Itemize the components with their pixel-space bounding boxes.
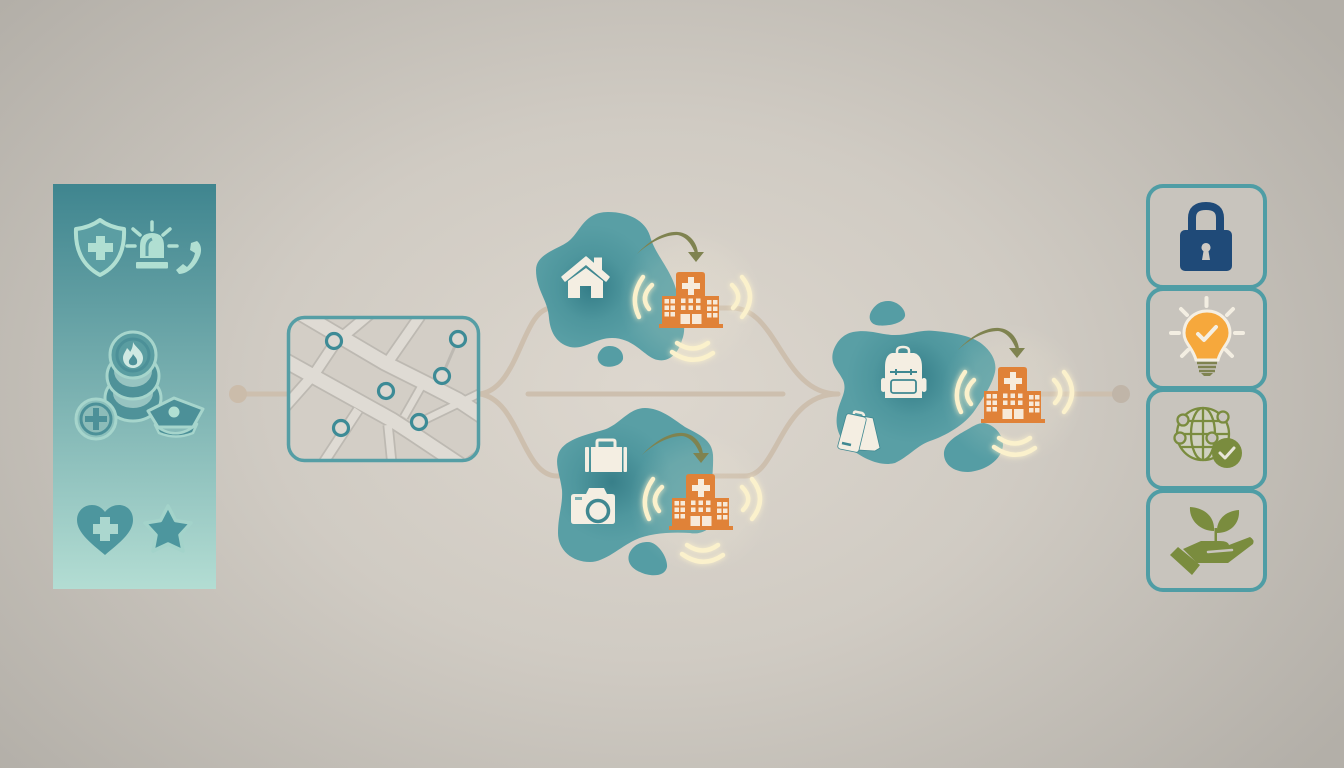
outcome card: sustainability [1148, 491, 1265, 590]
hospital halo [941, 323, 1085, 467]
connector lines [238, 308, 1121, 476]
outcome card: global network [1148, 390, 1265, 488]
icon: backpack [881, 347, 926, 398]
icon: medical shield [76, 220, 124, 275]
icon: hospital [659, 272, 723, 328]
arrow [958, 328, 1025, 358]
icon: telephone [176, 241, 201, 274]
map markers [326, 332, 466, 436]
signal waves [645, 479, 760, 562]
icon: travel bags [838, 412, 880, 452]
icon: heart with cross [77, 505, 133, 555]
icon: globe [1174, 408, 1229, 460]
icon: hospital [981, 367, 1045, 423]
end node [1112, 385, 1130, 403]
blob cluster: luggage and camera [557, 408, 773, 575]
icon: star [145, 506, 191, 551]
hospital halo [629, 430, 773, 574]
icon: light bulb [1171, 298, 1243, 376]
icon: briefcase [585, 440, 627, 472]
icon: check badge [1212, 438, 1242, 468]
blob cluster: home [536, 212, 763, 372]
panel: outcomes [1148, 186, 1265, 590]
icon: hospital [669, 474, 733, 530]
panel: emergency services [53, 184, 216, 589]
blob cluster: backpack and bags [832, 301, 1085, 472]
map panel [286, 316, 480, 462]
icon: camera [571, 488, 615, 524]
outcome card: insight [1148, 289, 1265, 388]
signal waves [957, 372, 1072, 455]
icon: police cap [148, 398, 203, 436]
start node [229, 385, 247, 403]
icon: house [562, 257, 609, 298]
road network [290, 319, 477, 459]
arrow [642, 433, 709, 463]
icon: stacked responder badges [105, 332, 161, 421]
outcome card: security [1148, 186, 1265, 287]
arrow [637, 232, 704, 262]
hospital halo [619, 228, 763, 372]
icon: siren [127, 222, 177, 268]
signal waves [635, 277, 750, 360]
icon: padlock [1180, 206, 1232, 271]
icon: hand holding sprout [1170, 507, 1254, 575]
icon: medical badge [76, 399, 116, 439]
